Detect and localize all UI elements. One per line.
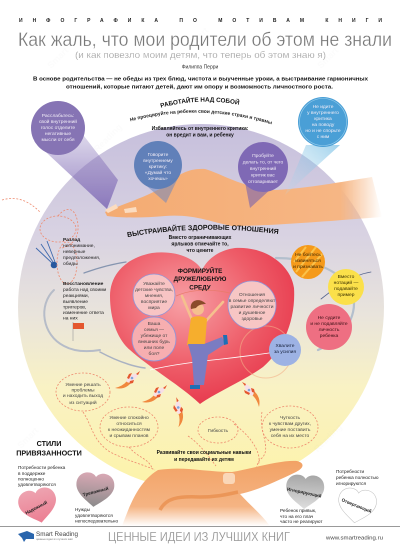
thumb nail xyxy=(223,473,235,484)
text: recovery: реакциями, xyxy=(63,294,89,299)
heart inner ring xyxy=(150,290,292,378)
heart: avoidant: Игнорирующий xyxy=(287,485,322,499)
skill oval 2 xyxy=(100,407,158,447)
watermarks: Smart xyxy=(315,45,340,70)
circle: tip 1 xyxy=(31,101,85,155)
planet: yellow: нотаций — xyxy=(334,279,358,286)
light beams: top circles xyxy=(34,136,340,209)
heart circle 3 xyxy=(228,281,276,329)
circle: tip 3: делать то, от чего xyxy=(243,160,284,166)
circle: tip 2: «Думай что xyxy=(145,169,171,176)
heart: secure: Надежный xyxy=(24,499,48,516)
dashed links xyxy=(83,412,266,472)
footer rule xyxy=(0,526,400,527)
note: avoidant: что на его плач xyxy=(280,514,314,519)
circle: tip 3 xyxy=(238,142,288,192)
circle: tip 2: критику: xyxy=(149,165,167,170)
heart: secure xyxy=(16,485,60,527)
note: ignored: ребенка полностью xyxy=(336,475,379,480)
text: recovery: триггеров, xyxy=(63,306,86,310)
heart circle 2: семья — xyxy=(144,328,164,333)
note: secure: удовлетворяются xyxy=(18,482,56,487)
text: inner critic: Избавляйтесь от внутреннего критика: xyxy=(152,125,249,132)
text: recovery: работа над своими xyxy=(63,287,107,293)
planet: orange: и признавать xyxy=(293,265,323,270)
text: conflict: неверные xyxy=(63,250,86,255)
text: inner critic: он вредит и вам, и ребенку xyxy=(166,132,234,138)
note: anxious: Нужды xyxy=(75,507,91,512)
logo: Smart Reading xyxy=(18,531,78,542)
planet: pink: личность xyxy=(319,328,340,333)
background circle xyxy=(18,124,384,490)
heading: build healthy relations: ВЫСТРАИВАЙТЕ ЗДОРОВЫЕ ОТНОШЕНИЯ xyxy=(127,224,278,237)
footer url: www.smartreading.ru xyxy=(325,536,383,542)
heart circle 2: убежище от xyxy=(141,333,168,339)
heart circle 1: мира xyxy=(148,306,160,311)
note: ignored: игнорируются xyxy=(336,481,366,486)
circle: tip 4: с ним xyxy=(317,135,330,140)
watermarks: Smart xyxy=(45,45,70,70)
text: social skills: и передавайте их детям xyxy=(174,456,234,463)
skill oval 4: умение поставить xyxy=(270,428,311,433)
heart circle 3: здоровье xyxy=(241,317,263,322)
text: recovery: на них xyxy=(63,316,78,322)
text: labels: что цените xyxy=(187,248,214,254)
text: conflict: обиды xyxy=(63,261,78,267)
heart circle 2: Ваша xyxy=(148,321,161,327)
circle: tip 4: Не идите xyxy=(313,104,334,110)
heart circle 2: или поле xyxy=(144,346,165,351)
skill oval 1: из ситуаций xyxy=(69,399,97,406)
skill oval 4: к чувствам других, xyxy=(269,422,311,427)
watermarks xyxy=(15,25,344,454)
intro text: В основе родительства — не обеды из трех блюд, чистота и выученные уроки, а выстраивание гармоничных xyxy=(33,76,368,82)
heart circle 1: Уважайте xyxy=(143,280,165,287)
planet: yellow: пример xyxy=(338,293,355,298)
text: social skills: Развивайте свои социальные навыки xyxy=(157,449,251,456)
heading: friendly environment: ФОРМИРУЙТЕ xyxy=(178,266,222,275)
heading: attachment styles: СТИЛИ xyxy=(37,439,61,448)
planet: orange xyxy=(291,245,325,279)
heading: work on yourself: РАБОТАЙТЕ НАД СОБОЙ xyxy=(160,96,240,108)
comet xyxy=(36,241,57,268)
planet: pink: и не подавляйте xyxy=(310,320,348,327)
heart circle 1: мнения, xyxy=(145,294,163,299)
planet: blue xyxy=(269,334,301,366)
planet: yellow: Вместо xyxy=(338,274,355,280)
heart: anxious: Тревожный xyxy=(82,485,109,497)
planet: pink xyxy=(306,304,352,350)
heart circle 3: Отношения xyxy=(239,292,265,298)
skill oval 2: относиться xyxy=(116,422,142,427)
logo: Smart Reading: Smart Reading xyxy=(36,531,78,538)
text: recovery: выявление xyxy=(63,300,88,305)
heart circle 3: и душевное xyxy=(239,311,266,316)
planet: pink: Не судите xyxy=(318,315,341,321)
logo: Smart Reading: ценные идеи из лучших книг xyxy=(36,537,73,541)
circle: tip 4 xyxy=(298,97,348,147)
heading: friendly environment: ДРУЖЕЛЮБНУЮ xyxy=(174,276,227,283)
skill oval 2: к неожиданностям xyxy=(108,428,151,433)
note: secure: Потребности ребенка xyxy=(18,465,66,470)
circle: tip 1: негативные xyxy=(45,132,71,137)
top label: series: ИНФОГРАФИКА ПО МОТИВАМ КНИГИ xyxy=(19,18,382,24)
text: recovery: Восстановление xyxy=(63,281,104,287)
heart xyxy=(110,248,294,404)
skill oval 4: себя на их место xyxy=(271,433,310,439)
circle: tip 3: критик вас xyxy=(251,174,275,178)
planet: pink: ребенка xyxy=(320,333,339,339)
skill oval 3 xyxy=(198,417,238,443)
circle: tip 1: свой внутренний xyxy=(39,118,77,125)
heart circle 1: детские чувства, xyxy=(135,288,173,293)
note: anxious: непоследовательно xyxy=(75,518,119,524)
skill oval 1 xyxy=(56,373,110,411)
footer slogan: ЦЕННЫЕ ИДЕИ ИЗ ЛУЧШИХ КНИГ xyxy=(108,530,290,544)
text: labels: ярлыков отмечайте то, xyxy=(171,240,229,248)
dashed ovals, conflict xyxy=(2,198,78,284)
heart: avoidant xyxy=(285,474,325,510)
circle: tip 2 xyxy=(134,141,182,189)
heart circle 3: в семье определяют xyxy=(229,299,276,304)
watermarks: Reading xyxy=(122,312,154,344)
figure: jumping boy xyxy=(182,296,228,389)
skill oval 3: Гибкость xyxy=(208,428,228,434)
circle: tip 2: Говорите xyxy=(148,152,169,158)
planet: blue: за усилия xyxy=(274,350,296,355)
note: ignored: Потребности xyxy=(336,469,365,474)
author: Филиппа Перри xyxy=(182,64,219,70)
note: avoidant: Ребенок привык, xyxy=(280,508,316,513)
heart circle 2 xyxy=(132,317,176,361)
skill oval 4 xyxy=(262,406,318,448)
skill oval 2: Умение спокойно xyxy=(109,414,149,421)
bottom hand xyxy=(122,461,303,526)
heart circle 1: восприятие xyxy=(141,300,167,305)
text: labels: Вместо ограничивающих xyxy=(169,235,232,241)
circle: tip 1: мысли от себя xyxy=(42,137,75,143)
skill oval 1: Умение решать xyxy=(65,382,101,388)
planet: blue: Хвалите xyxy=(275,343,295,349)
text: conflict: Разлад xyxy=(63,237,81,243)
watermarks: Reading xyxy=(92,122,124,154)
heart circle 1 xyxy=(133,274,175,316)
text: recovery: изменение ответа xyxy=(63,311,104,316)
heart: rejecting xyxy=(336,487,378,525)
note: secure: полноценно xyxy=(18,476,44,482)
text: conflict: непонимание, xyxy=(63,244,95,249)
note: secure: в поддержке xyxy=(18,471,46,476)
skill oval 2: и срывам планов xyxy=(110,434,149,439)
circle: tip 1: Расслабьтесь: xyxy=(42,113,74,119)
planet: yellow: подавайте xyxy=(334,285,358,292)
subtitle: (и как повезло моим детям, что теперь об этом знаю я) xyxy=(75,50,326,60)
heart circle 2: внешних бурь xyxy=(138,339,170,345)
rockets xyxy=(115,371,260,428)
flag xyxy=(73,322,84,341)
heart circle 2: боя? xyxy=(149,351,160,357)
circle: tip 3: отговаривает xyxy=(248,180,279,185)
note: anxious: удовлетворяются xyxy=(75,513,113,518)
subheading: do not project: Не проецируйте на ребенка свои детские страхи и травмы xyxy=(130,109,272,124)
heading: friendly environment: СРЕДУ xyxy=(189,284,211,292)
planet: orange: Не бойтесь xyxy=(295,251,321,258)
top hand xyxy=(105,169,382,226)
watermarks: Smart xyxy=(15,425,40,450)
circle: tip 4: но и не спорьте xyxy=(305,129,341,134)
skill oval 4: Чуткость xyxy=(280,415,300,421)
circle: tip 2: хочешь» xyxy=(148,177,168,182)
finger nails xyxy=(105,204,137,213)
heart: rejecting: Отвергающий xyxy=(341,496,373,514)
circle: tip 3: внутренний xyxy=(250,165,276,172)
watermarks: Smart xyxy=(185,25,210,50)
orbit rings xyxy=(44,258,371,368)
note: avoidant: часто не реагируют xyxy=(280,519,323,524)
circle: tip 4: на поводу xyxy=(312,123,335,128)
heart: anxious xyxy=(75,471,115,509)
heart circle 3: развитие личности xyxy=(231,305,274,310)
text: conflict: предположения, xyxy=(63,256,100,261)
planet: yellow xyxy=(328,269,364,305)
heading: attachment styles: ПРИВЯЗАННОСТИ xyxy=(16,448,82,458)
circle: tip 1: голос отделите xyxy=(41,126,75,131)
circle: tip 3: Пробуйте xyxy=(252,152,274,159)
planet: orange: извиняться xyxy=(295,259,321,264)
circle: tip 4: у внутреннего xyxy=(307,111,339,116)
skill oval 1: проблемы xyxy=(71,388,95,394)
circle: tip 2: внутреннему xyxy=(143,159,173,164)
circle: tip 4: критика xyxy=(314,117,332,122)
intro text: отношений, которые питают детей, дают им опору и возможность личностного роста. xyxy=(66,84,334,90)
skill oval 1: и находить выход xyxy=(63,394,103,399)
watermarks: Reading xyxy=(312,422,344,454)
